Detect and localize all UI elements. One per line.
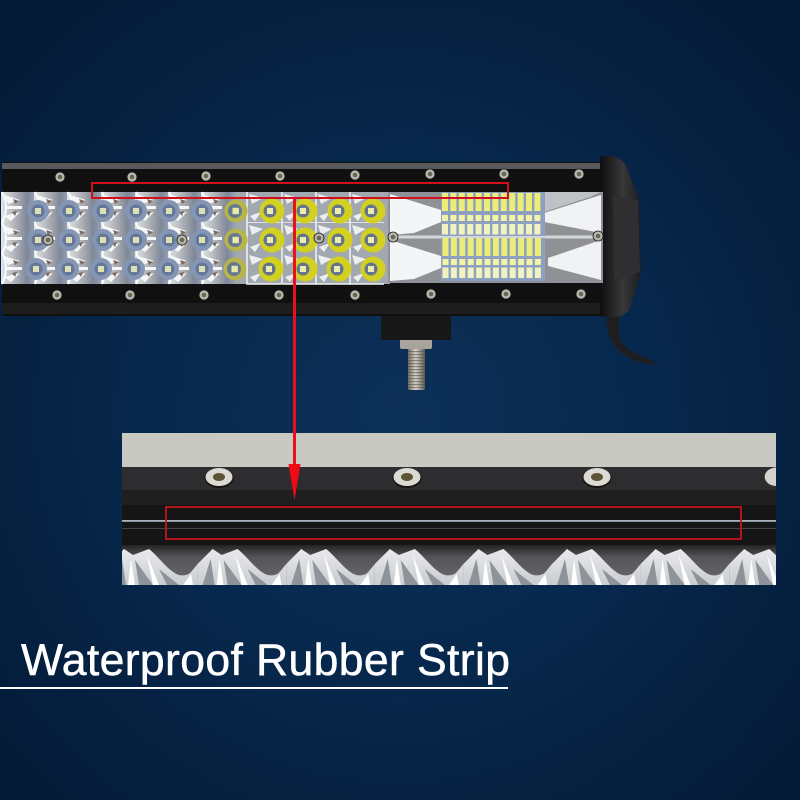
bar body [2,162,612,316]
end cap housing [600,156,641,317]
close-up screws [204,468,776,488]
title: Waterproof Rubber Strip [21,636,510,685]
power cable [607,316,664,366]
light grey upper band [122,433,776,467]
lens strip [109,545,800,585]
red arrow [288,198,300,500]
mounting bracket [381,303,451,340]
reflector panel [1,192,390,284]
mounting bolt [400,338,432,390]
red highlight box on close-up [166,507,741,539]
dark housing band [122,467,776,490]
SMD LED panel [388,192,603,283]
rubber strip [122,520,776,529]
LED light bar product photo [1,156,664,390]
title underline [0,687,508,689]
red highlight box on light bar [92,183,508,198]
bar bottom screws [52,289,586,300]
detail close-up panel [109,433,800,585]
bar top screws [55,169,584,182]
